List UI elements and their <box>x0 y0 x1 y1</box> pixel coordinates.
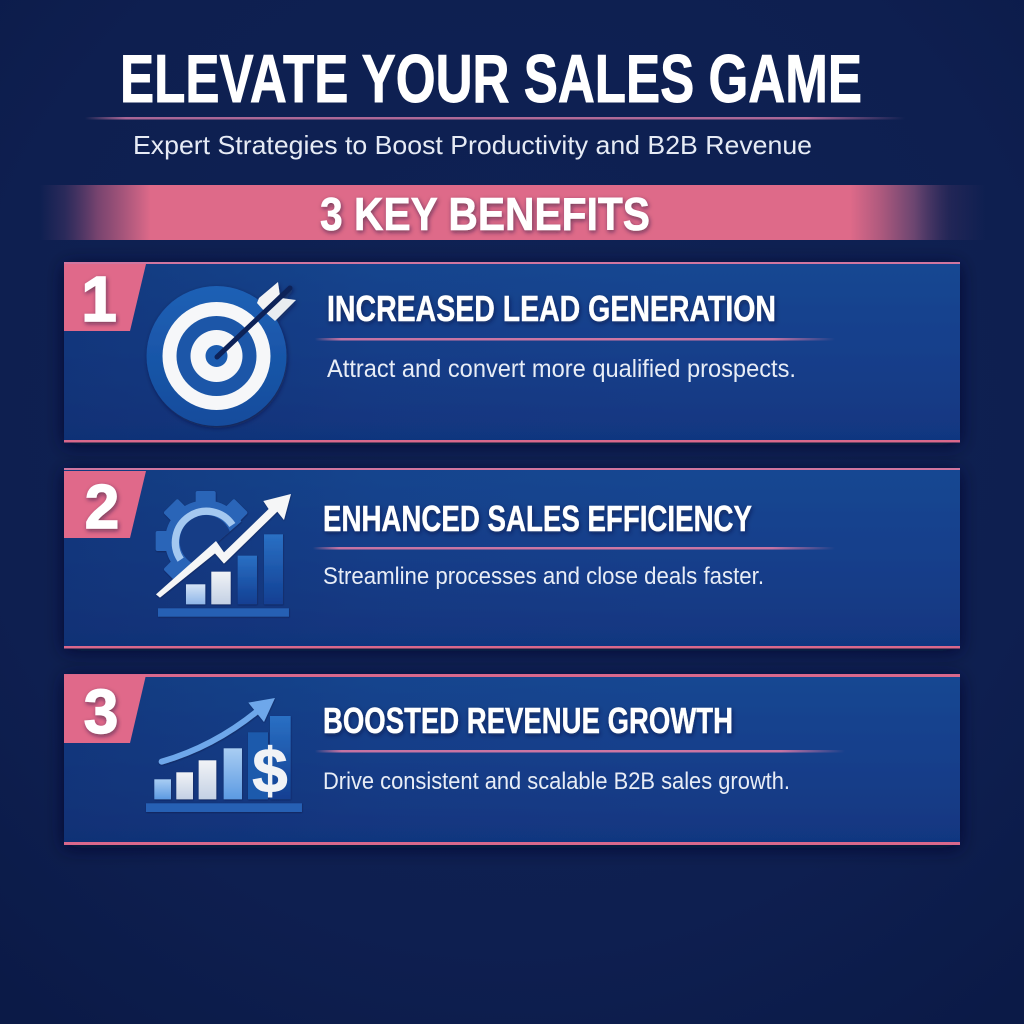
number badge 2: 2 <box>85 473 119 542</box>
number badge 3: 3 <box>84 678 118 747</box>
description: Streamline processes and close deals faster. <box>323 563 764 590</box>
icon: revenue bars with dollar <box>146 698 302 812</box>
number badge 1 <box>64 263 146 335</box>
panel: revenue growth <box>64 674 960 845</box>
icon: revenue bars with dollar: $ <box>252 737 288 807</box>
icon: gear and rising chart <box>156 491 291 617</box>
number badge 1: 1 <box>81 263 117 335</box>
rule <box>315 750 845 752</box>
title rule <box>85 117 905 120</box>
panel: sales efficiency <box>64 468 960 648</box>
panel: lead generation <box>64 262 960 442</box>
number badge 3 <box>64 675 146 747</box>
banner <box>30 185 995 240</box>
heading: BOOSTED REVENUE GROWTH <box>323 700 733 741</box>
description: Drive consistent and scalable B2B sales growth. <box>323 768 790 795</box>
subtitle: Expert Strategies to Boost Productivity and B2B Revenue <box>133 130 812 160</box>
rule <box>315 338 835 340</box>
description: Attract and convert more qualified prospects. <box>327 355 796 383</box>
heading: INCREASED LEAD GENERATION <box>327 288 776 329</box>
number badge 2 <box>64 471 146 542</box>
rule <box>313 547 835 550</box>
icon: target with arrow <box>146 282 296 426</box>
banner heading: 3 KEY BENEFITS <box>320 188 650 240</box>
heading: ENHANCED SALES EFFICIENCY <box>323 498 752 539</box>
